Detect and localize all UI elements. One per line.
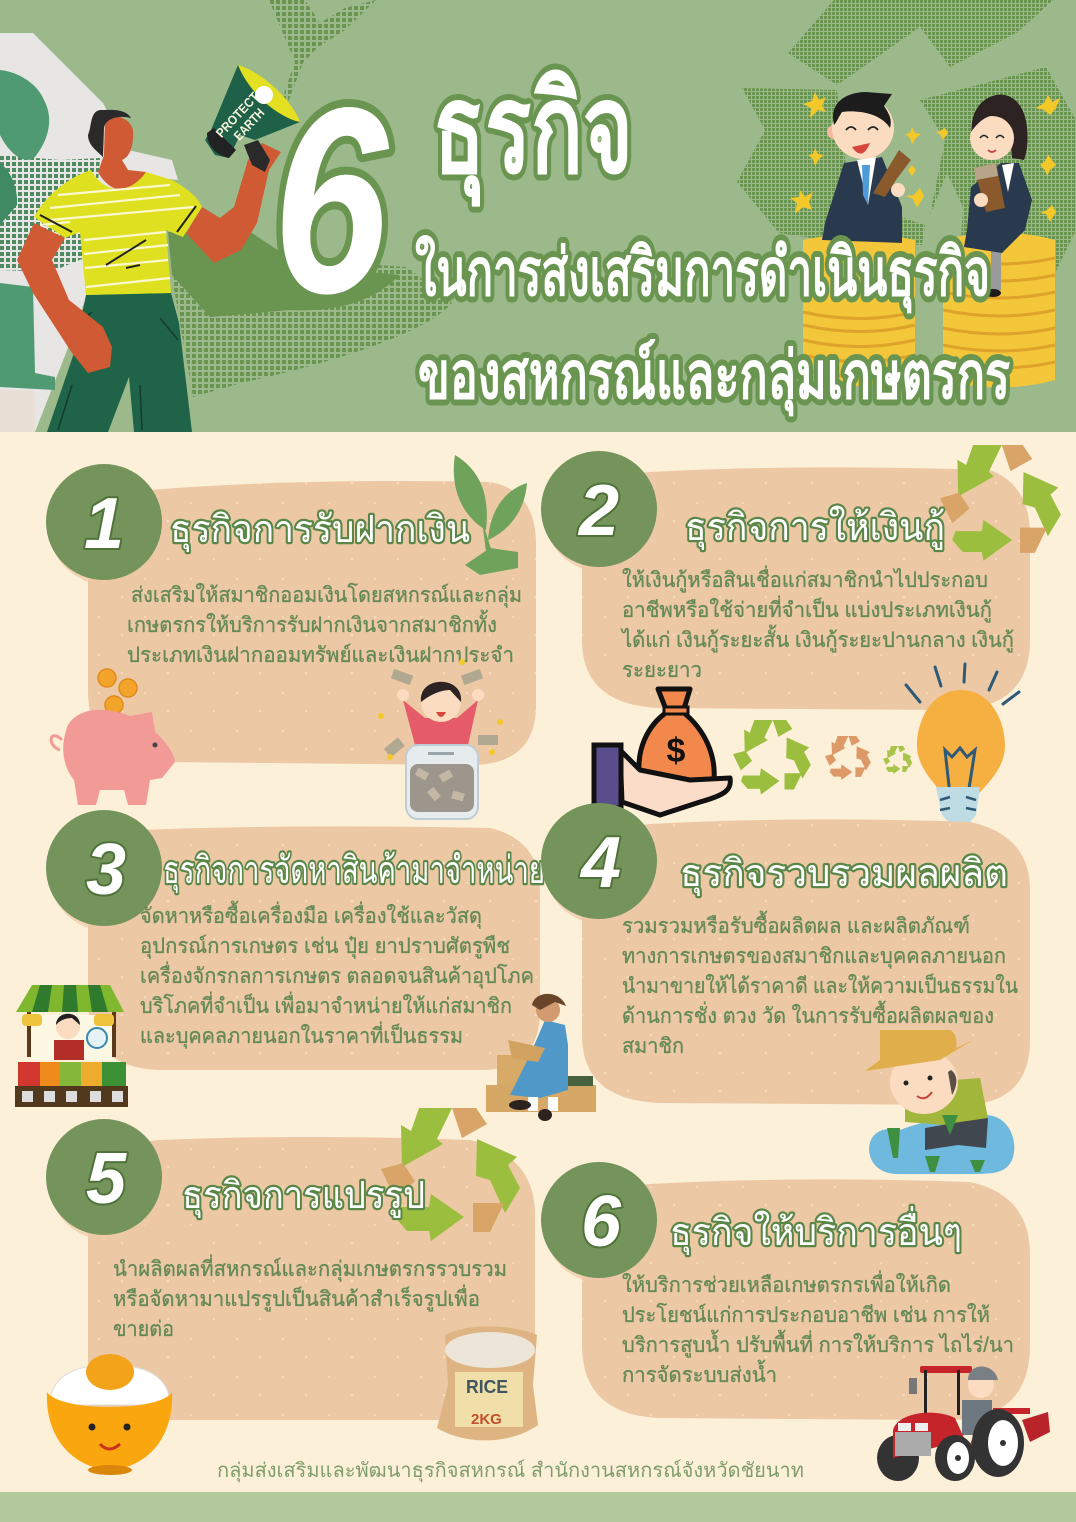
body 6: ให้บริการช่วยเหลือเกษตรกรเพื่อให้เกิด	[622, 1270, 951, 1297]
body 5: หรือจัดหามาแปรรูปเป็นสินค้าสำเร็จรูปเพื่อ	[113, 1284, 480, 1312]
title: ธุรกิจ: ธุรกิจ	[433, 60, 633, 207]
icon: recycle panel 5	[381, 1108, 520, 1241]
number badge 5	[46, 1119, 165, 1240]
icon: market stall	[15, 985, 128, 1107]
body 6: บริการสูบน้ำ ปรับพื้นที่ การให้บริการ ไถไร่/นา	[622, 1330, 1014, 1358]
collage paper and leaves	[0, 33, 178, 432]
man with megaphone	[17, 65, 300, 432]
body 1	[127, 583, 522, 667]
body 4: สมาชิก	[622, 1035, 684, 1058]
body 3: อุปกรณ์การเกษตร เช่น ปุ๋ย ยาปราบศัตรูพืช	[140, 934, 510, 959]
body 2: ระยะยาว	[622, 659, 702, 682]
icon: piggy bank	[51, 669, 175, 805]
trousers	[47, 293, 192, 432]
number badge 3	[46, 810, 165, 931]
body 3: และบุคคลภายนอกในราคาที่เป็นธรรม	[140, 1021, 463, 1049]
body 1: เกษตรกรให้บริการรับฝากเงินจากสมาชิกทั้ง	[127, 610, 497, 637]
body 4: รวมรวมหรือรับซื้อผลิตผล และผลิตภัณฑ์	[622, 911, 970, 938]
panel 4	[541, 803, 1030, 1105]
icon: three small recycle symbols	[733, 720, 912, 794]
body 4: นำมาขายให้ได้ราคาดี และให้ความเป็นธรรมใน	[622, 972, 1018, 998]
icon: girl with money jar	[378, 659, 503, 819]
megaphone	[205, 65, 300, 158]
icon: rice bowl with egg	[47, 1354, 172, 1475]
icon: red tractor	[877, 1366, 1050, 1481]
body 5	[113, 1254, 507, 1341]
icon: rice sack: 2KG	[471, 1411, 502, 1428]
halftone recycle symbol	[788, 0, 1053, 85]
number badge 5: 5	[86, 1139, 127, 1219]
heading 6: ธุรกิจให้บริการอื่นๆ	[670, 1206, 962, 1255]
body 3: บริโภคที่จำเป็น เพื่อมาจำหน่ายให้แก่สมาชิก	[140, 991, 512, 1018]
panel 1	[46, 464, 536, 765]
halftone leaf top	[269, 0, 376, 133]
number badge 1	[46, 464, 165, 585]
title: big six: 6	[273, 53, 389, 349]
icon: vendor with produce	[486, 994, 596, 1121]
number badge 4: 4	[579, 823, 621, 903]
body 2: ได้แก่ เงินกู้ระยะสั้น เงินกู้ระยะปานกลาง เงินกู้	[620, 625, 1014, 653]
heading 5: ธุรกิจการแปรรูป	[182, 1175, 425, 1218]
number badge 6	[541, 1162, 660, 1283]
icon: rice sack	[437, 1326, 538, 1440]
number badge 6: 6	[581, 1182, 622, 1262]
halftone blob behind the six	[172, 235, 452, 397]
body 2: อาชีพหรือใช้จ่ายที่จำเป็น แบ่งประเภทเงินกู้	[622, 595, 992, 623]
icon: farmer in rice paddy	[865, 1030, 1014, 1174]
number badge 3: 3	[86, 830, 126, 910]
head and neck	[98, 116, 146, 190]
businessman	[822, 92, 911, 243]
footer credit: กลุ่มส่งเสริมและพัฒนาธุรกิจสหกรณ์ สำนักงานสหกรณ์จังหวัดชัยนาท	[217, 1459, 804, 1483]
icon: seedling	[454, 455, 527, 575]
arms	[17, 223, 112, 373]
icon: hand holding money bag: $	[667, 732, 686, 770]
panel 3	[46, 810, 545, 1070]
body 4	[622, 911, 1018, 1058]
heading 1: ธุรกิจการรับฝากเงิน	[170, 509, 470, 552]
businesswoman	[964, 95, 1032, 297]
body 2: ให้เงินกู้หรือสินเชื่อแก่สมาชิกนำไปประกอบ	[622, 565, 988, 593]
number badge 2	[541, 451, 660, 572]
body 5: นำผลิตผลที่สหกรณ์และกลุ่มเกษตรกรรวบรวม	[113, 1254, 507, 1282]
body 3: เครื่องจักรกลการเกษตร ตลอดจนสินค้าอุปโภค	[140, 961, 534, 989]
body 6: การจัดระบบส่งน้ำ	[622, 1360, 777, 1387]
body 1: ประเภทเงินฝากออมทรัพย์และเงินฝากประจำ	[127, 643, 514, 667]
header banner	[0, 0, 1076, 432]
icon: light bulb	[906, 664, 1019, 828]
icon: hand holding money bag	[594, 689, 730, 815]
number badge 2: 2	[577, 471, 619, 551]
icon: rice sack: RICE	[466, 1377, 508, 1397]
body 6	[622, 1270, 1014, 1387]
body 4: ด้านการชั่ง ตวง วัด ในการรับซื้อผลิตผลของ	[622, 1001, 994, 1028]
striped shirt	[34, 170, 202, 295]
heading 3: ธุรกิจการจัดหาสินค้ามาจำหน่าย	[163, 850, 545, 893]
text: PROTECT EARTH	[213, 89, 273, 151]
panel 5	[46, 1108, 535, 1420]
title	[273, 53, 1010, 417]
panel 2	[541, 451, 1030, 710]
text: PROTECT EARTH: EARTH	[231, 105, 267, 143]
number badge 4	[541, 803, 660, 924]
body 5: ขายต่อ	[113, 1318, 174, 1341]
body 3: จัดหาหรือซื้อเครื่องมือ เครื่องใช้และวัสดุ	[140, 901, 482, 929]
body 2	[620, 565, 1014, 682]
body 4: ทางการเกษตรของสมาชิกและบุคคลภายนอก	[622, 945, 1006, 969]
body 1: ส่งเสริมให้สมาชิกออมเงินโดยสหกรณ์และกลุ่ม	[131, 583, 522, 608]
footer strip	[0, 1492, 1076, 1522]
body 6: ประโยชน์แก่การประกอบอาชีพ เช่น การให้	[622, 1303, 990, 1327]
icon: recycle top right	[940, 445, 1061, 561]
heading 2: ธุรกิจการให้เงินกู้	[685, 506, 945, 550]
coin stacks	[803, 232, 1055, 388]
text: PROTECT EARTH: PROTECT	[213, 89, 262, 140]
heading 4: ธุรกิจรวบรวมผลผลิต	[680, 853, 1008, 896]
body 3	[140, 901, 534, 1049]
panel 6	[541, 1162, 1030, 1420]
gold stars	[790, 92, 1060, 222]
number badge 1: 1	[84, 484, 124, 564]
